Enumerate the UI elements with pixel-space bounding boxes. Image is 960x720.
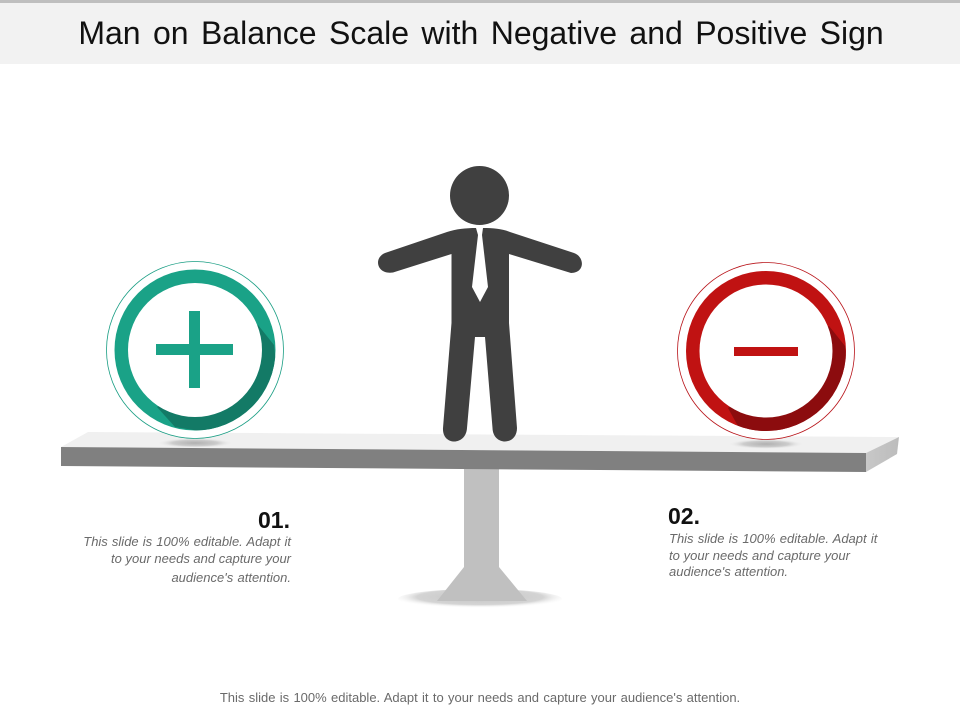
description 01: audience's attention.	[171, 570, 291, 585]
description 01: This slide is 100% editable. Adapt it	[83, 534, 292, 549]
description 01: to your needs and capture your	[111, 551, 292, 566]
body with arms, legs and tie cut-out	[378, 228, 582, 442]
scale platform	[61, 432, 899, 472]
head	[450, 166, 509, 225]
description 02: to your needs and capture your	[669, 548, 851, 563]
pillar base shadow	[398, 589, 562, 609]
header band	[0, 0, 960, 64]
description 02: This slide is 100% editable. Adapt it	[669, 531, 879, 546]
icon: man in suit with tie	[378, 166, 582, 442]
minus icon shadow	[728, 439, 804, 449]
title: Man on Balance Scale with Negative and Positive Sign	[78, 15, 884, 51]
footer note: This slide is 100% editable. Adapt it to your needs and capture your audience's attention.	[220, 690, 740, 705]
scale pillar	[437, 468, 527, 601]
text block 01	[83, 507, 292, 585]
platform top surface	[61, 432, 899, 453]
plus icon shadow	[157, 438, 233, 448]
description 01	[83, 534, 292, 585]
icon: minus sign in red ring	[678, 262, 856, 446]
platform front face	[61, 447, 866, 472]
number 01: 01.	[258, 507, 290, 533]
description 02	[669, 531, 879, 579]
platform side face	[866, 437, 899, 472]
icon: plus sign in green ring	[106, 262, 285, 445]
text block 02	[668, 503, 879, 579]
description 02: audience's attention.	[669, 564, 788, 579]
number 02: 02.	[668, 503, 700, 529]
